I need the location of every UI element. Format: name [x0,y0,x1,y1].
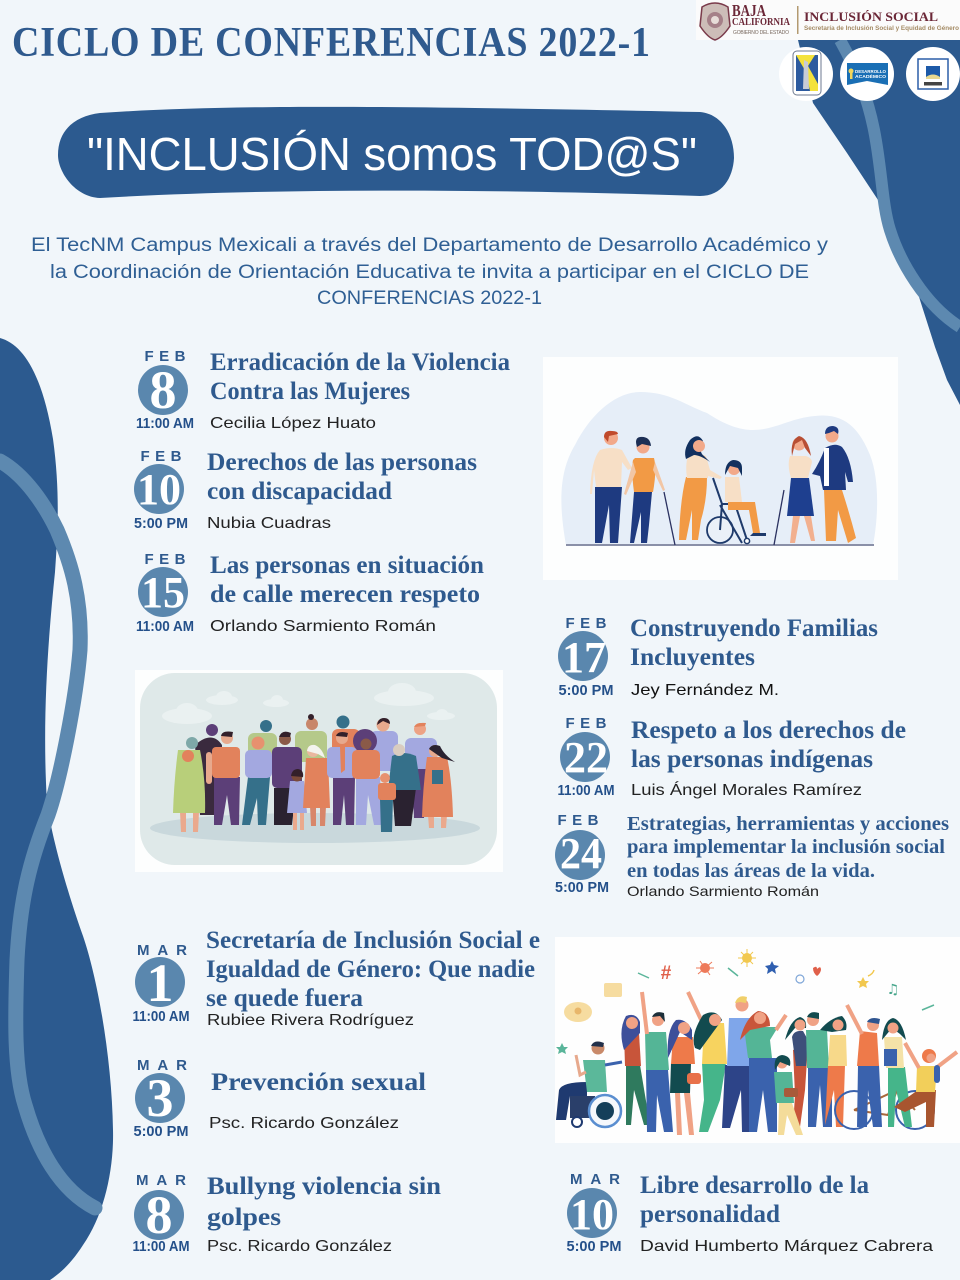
illustration: diverse crowd [135,670,503,872]
speaker: Nubia Cuadras [207,515,331,532]
logo: Desarrollo Académico [840,47,894,101]
talk title: Secretaría de Inclusión Social e [206,927,540,954]
date badge: 5:00 PM [566,1238,622,1255]
figure: man in navy jacket [812,426,856,543]
talk title [206,927,540,1012]
social icons: # [661,963,672,984]
header logos: Baja California / Inclusión Social [696,0,960,40]
date badge: 5:00 PM [134,1123,188,1140]
talk title: Contra las Mujeres [210,378,410,405]
header logos: Baja California / Inclusión Social: CALIFORNIA [732,17,791,28]
date badge [132,1172,190,1255]
date badge: M A R [136,1172,186,1189]
talk title: golpes [207,1204,281,1231]
event: Mar 8 [132,1172,441,1255]
date badge: 8 [146,1185,172,1245]
logo: Orientación Educativa [906,47,960,101]
date badge: 24 [560,829,602,878]
date badge [134,448,188,532]
date badge: 5:00 PM [558,682,614,699]
figure: woman with cane in orange [624,437,675,545]
date badge: 22 [564,733,608,782]
figure: woman pushing wheelchair [679,436,722,540]
speaker: Orlando Sarmiento Román [627,883,819,899]
speaker: David Humberto Márquez Cabrera [640,1238,933,1255]
talk title: de calle merecen respeto [210,581,480,608]
logo: Desarrollo Académico: ACADÉMICO [855,72,887,79]
date badge: 10 [137,465,181,514]
event: Feb 15 [136,551,484,635]
date badge: F E B [144,348,186,365]
crowd: back row [195,714,437,818]
talk title [630,615,878,671]
logo: Tecnológico de Mexicali [779,47,833,101]
talk title: se quede fuera [206,985,364,1012]
event: Mar 10 [566,1171,933,1255]
talk title [627,813,949,882]
date badge: F E B [566,615,607,632]
date badge: 3 [146,1068,174,1128]
background shape: top right [798,40,960,405]
date badge [566,1171,622,1255]
event: Mar 3 [134,1057,426,1140]
figure: woman with cane in skirt [774,436,815,545]
banner: INCLUSIÓN somos TOD@S: "INCLUSIÓN somos TOD@S" [87,128,697,180]
talk title: para implementar la inclusión social [627,836,945,858]
intro paragraph [31,235,829,309]
date badge [558,715,614,799]
social icons: ♫ [887,982,899,998]
date badge: 17 [562,633,606,682]
event: Mar 1 [132,927,540,1029]
talk title: con discapacidad [207,478,392,505]
date badge: 11:00 AM [136,618,194,635]
date badge [134,1057,188,1140]
talk title: Libre desarrollo de la [640,1172,869,1199]
header logos: Baja California / Inclusión Social: Secretaría de Inclusión Social y Equidad de Género [804,26,959,32]
event: Feb 10 [134,448,477,532]
intro paragraph: la Coordinación de Orientación Educativa te invita a participar en el CICLO DE [50,262,809,283]
talk title [210,552,484,608]
date badge: 5:00 PM [555,879,609,896]
talk title: Erradicación de la Violencia [210,349,510,376]
clouds [162,683,455,724]
talk title: en todas las áreas de la vida. [627,860,875,882]
intro paragraph: El TecNM Campus Mexicali a través del Departamento de Desarrollo Académico y [31,235,829,256]
talk title: Las personas en situación [210,552,484,579]
date badge: 1 [146,953,174,1013]
social icons [556,949,934,1054]
intro paragraph: CONFERENCIAS 2022-1 [317,288,542,309]
crowd: front row [173,729,455,832]
header logos: Baja California / Inclusión Social: INCLUSIÓN SOCIAL [804,9,938,24]
speaker: Orlando Sarmiento Román [210,618,436,635]
talk title: Igualdad de Género: Que nadie [206,956,535,983]
date badge: F E B [144,551,186,568]
date badge: F E B [566,715,607,732]
date badge [555,812,609,896]
header logos: Baja California / Inclusión Social: BAJA [732,1,767,20]
header logos: Baja California / Inclusión Social: GOBIERNO DEL ESTADO [733,30,789,36]
figure: woman in wheelchair [707,460,766,544]
title: CICLO DE CONFERENCIAS 2022-1 [12,18,650,65]
talk title: Construyendo Familias [630,615,878,642]
date badge: F E B [558,812,599,829]
date badge: M A R [137,1057,187,1074]
speaker: Cecilia López Huato [210,415,376,432]
date badge: 11:00 AM [132,1238,190,1255]
talk title: personalidad [640,1201,780,1228]
talk title [210,349,510,405]
background shape: left [0,338,113,1280]
date badge: F E B [140,448,182,465]
illustration: people with disabilities [543,357,898,580]
date badge [558,615,614,699]
event: Feb 22 [558,715,906,799]
date badge: 10 [570,1190,614,1239]
date badge [136,551,194,635]
talk title [631,717,906,773]
date badge: M A R [137,942,187,959]
event: Feb 8 [136,348,510,432]
event: Feb 17 [558,615,878,699]
talk title [207,449,477,505]
date badge: 11:00 AM [558,782,614,799]
date badge: 15 [141,568,185,617]
talk title: Estrategias, herramientas y acciones [627,813,949,835]
speaker: Jey Fernández M. [631,682,779,699]
figure: man in cream sweater [590,431,632,543]
talk title [640,1172,869,1228]
talk title: Bullyng violencia sin [207,1173,441,1200]
date badge: 11:00 AM [136,415,194,432]
date badge [132,942,190,1025]
illustration: celebrating group [555,937,960,1143]
talk title: Incluyentes [630,644,755,671]
date badge [136,348,194,432]
talk title: Prevención sexual [211,1069,426,1096]
date badge: 8 [150,360,176,420]
talk title: las personas indígenas [631,746,873,773]
banner: INCLUSIÓN somos TOD@S [58,107,734,198]
speaker: Psc. Ricardo González [209,1115,399,1132]
date badge: M A R [570,1171,620,1188]
speaker: Luis Ángel Morales Ramírez [631,780,862,799]
date badge: 11:00 AM [132,1008,190,1025]
speaker: Rubiee Rivera Rodríguez [207,1012,414,1029]
date badge: 5:00 PM [134,515,188,532]
event: Feb 24 [555,812,949,899]
group figures [556,992,957,1135]
talk title: Derechos de las personas [207,449,477,476]
talk title [207,1173,441,1231]
talk title: Respeto a los derechos de [631,717,906,744]
speaker: Psc. Ricardo González [207,1238,392,1255]
logo: Desarrollo Académico: DESARROLLO [855,69,886,74]
